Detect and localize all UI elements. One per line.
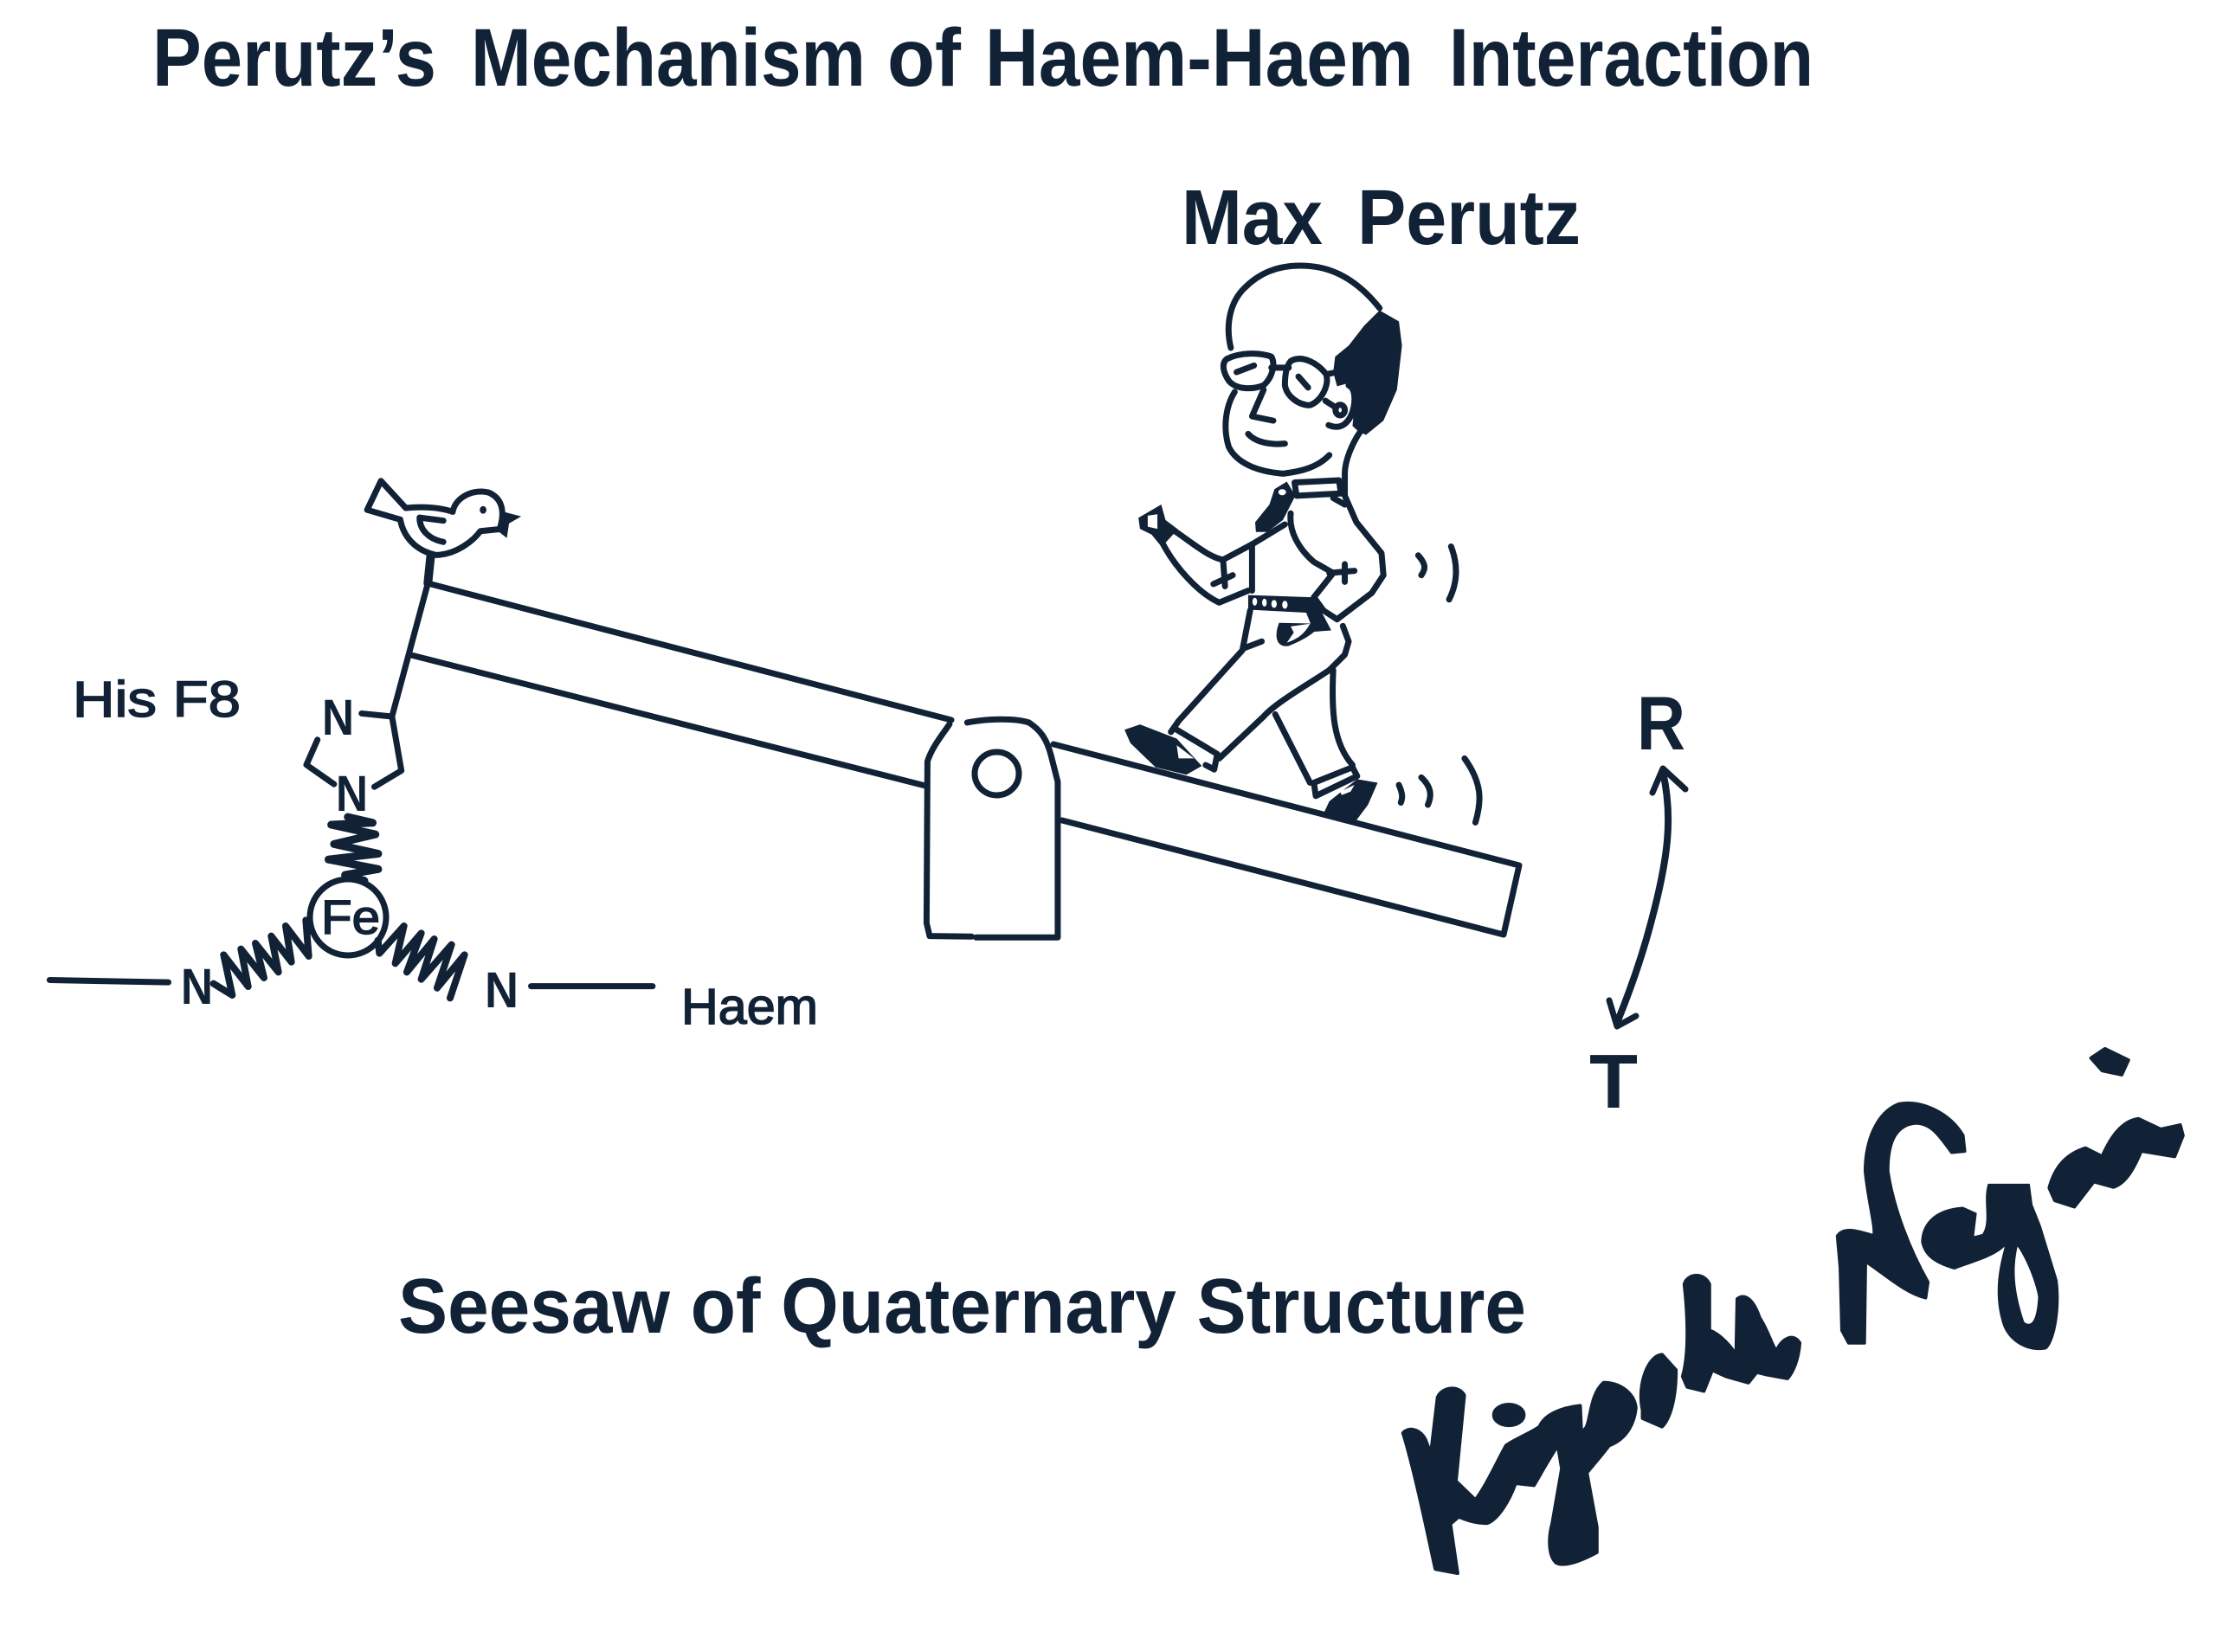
His F8 label: His F8 bbox=[73, 672, 241, 728]
seesaw beam bbox=[411, 583, 1519, 935]
iron atom bbox=[310, 879, 386, 955]
left arm bbox=[1163, 544, 1248, 602]
title: Haem-Haem bbox=[985, 12, 1414, 104]
title: of bbox=[887, 12, 961, 104]
hand on hip bbox=[1277, 623, 1322, 646]
Max Perutz cartoon figure bbox=[1124, 266, 1402, 820]
title: Mechanism bbox=[471, 12, 866, 104]
haem lines bbox=[49, 980, 653, 987]
title bbox=[152, 12, 1813, 104]
Haem label: Haem bbox=[681, 979, 818, 1035]
nitrogen labels bbox=[181, 690, 519, 1019]
iron atom: Fe bbox=[321, 890, 380, 944]
caption: Max Perutz: Perutz bbox=[1357, 175, 1581, 261]
right spring bbox=[378, 926, 465, 998]
hair bbox=[1333, 311, 1402, 434]
signature bbox=[1403, 1049, 2183, 1573]
belt bbox=[1248, 595, 1331, 632]
right arm bbox=[1291, 473, 1383, 620]
back cuff and shoe bbox=[1314, 768, 1357, 796]
caption: Max Perutz: Max bbox=[1182, 175, 1323, 261]
collar and bow tie bbox=[1295, 480, 1341, 496]
nitrogen labels: N bbox=[322, 690, 354, 746]
torso bbox=[1249, 544, 1255, 591]
ear bbox=[1333, 386, 1355, 423]
histidine ring and rod bbox=[306, 583, 428, 787]
left spring bbox=[214, 920, 309, 995]
nitrogen labels: N bbox=[336, 766, 368, 822]
arrow between R and T bbox=[1609, 768, 1685, 1026]
title: Interaction bbox=[1449, 12, 1813, 104]
motion marks bbox=[1399, 547, 1479, 822]
glasses bbox=[1223, 354, 1273, 389]
title: Perutz’s bbox=[152, 12, 436, 104]
head bbox=[1228, 266, 1380, 348]
R label: R bbox=[1637, 680, 1685, 766]
vertical spring bbox=[328, 817, 378, 881]
caption: seesaw of quaternary structure: Seesaw of Quaternary Structure bbox=[398, 1263, 1526, 1350]
nitrogen labels: N bbox=[485, 962, 519, 1019]
trousers bbox=[1171, 611, 1250, 732]
front cuff and shoe bbox=[1176, 730, 1217, 769]
nitrogen labels: N bbox=[181, 959, 213, 1015]
bird on the end of the rod bbox=[367, 481, 521, 583]
nose and mouth bbox=[1252, 389, 1273, 421]
caption: Max Perutz bbox=[1182, 175, 1581, 261]
T label: T bbox=[1589, 1038, 1638, 1124]
pivot pin bbox=[975, 752, 1019, 795]
seesaw pivot post bbox=[926, 719, 1058, 937]
